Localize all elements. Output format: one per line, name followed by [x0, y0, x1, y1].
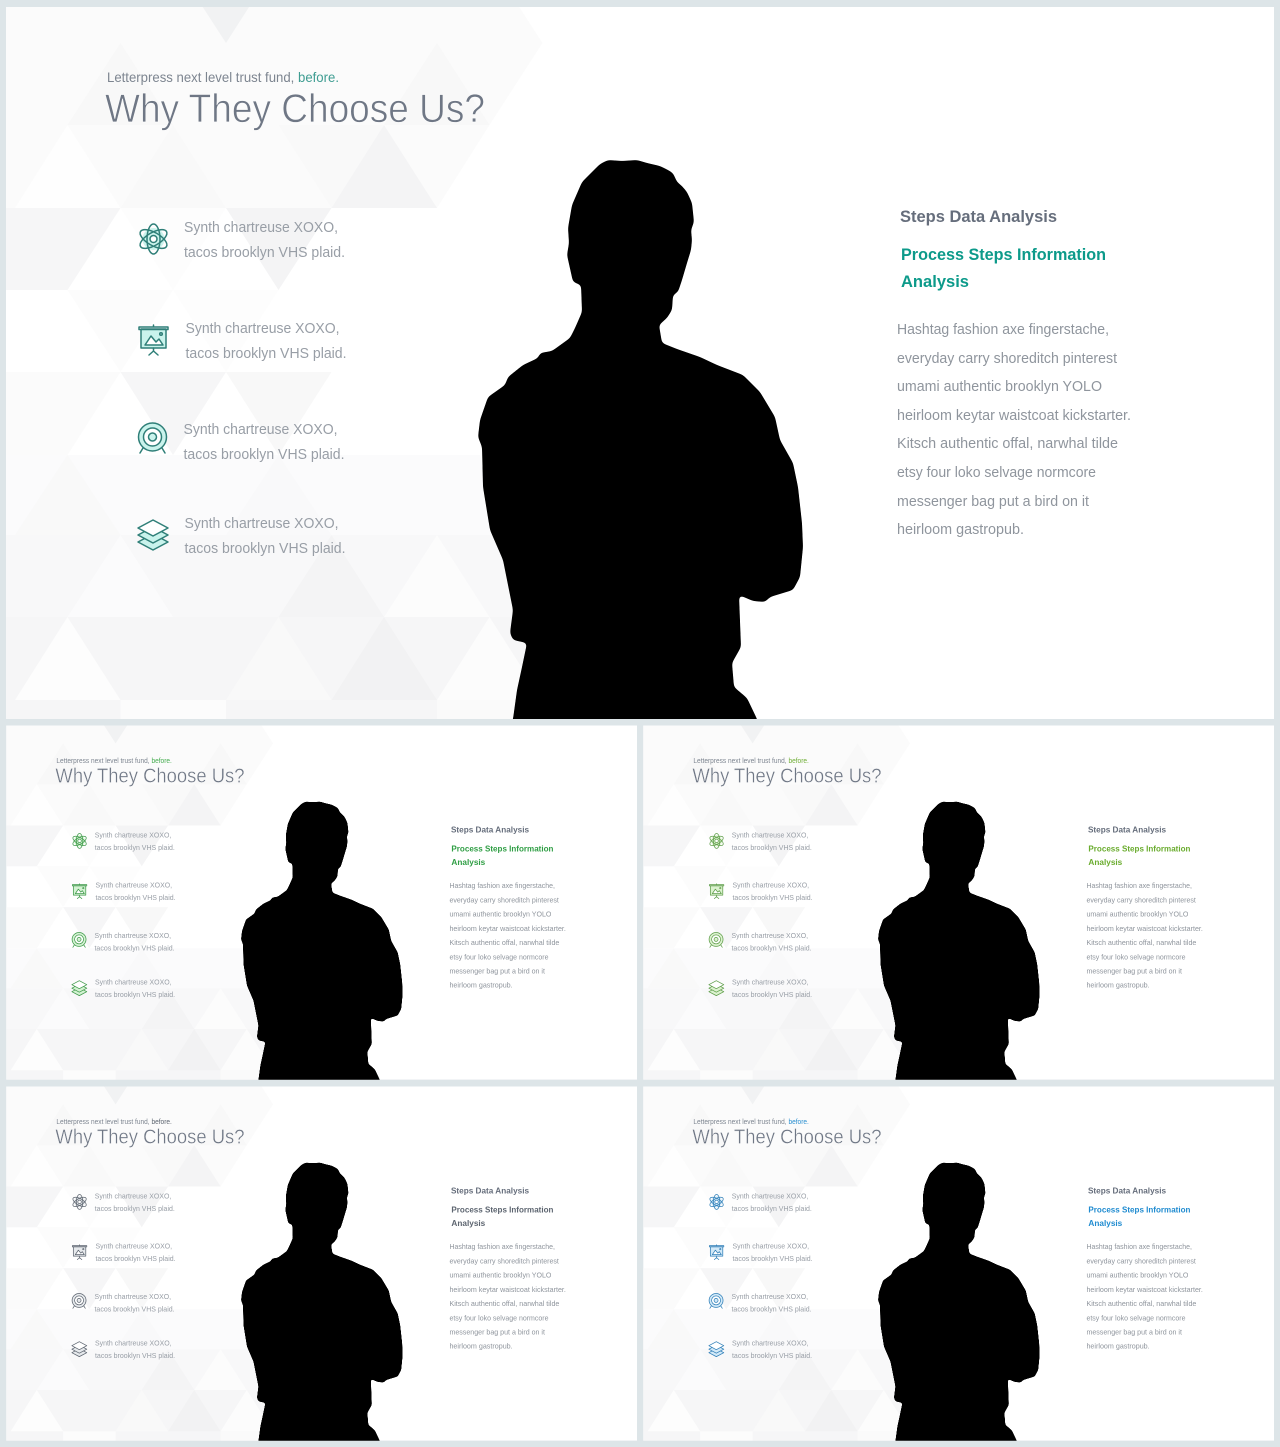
heading: steps data analysis: Steps Data Analysis [1088, 1185, 1166, 1195]
icon: atom [137, 224, 170, 254]
feature text 1: Synth chartreuse XOXO, [95, 830, 171, 839]
accent heading [451, 1204, 553, 1228]
icon: layers [72, 1342, 87, 1357]
feature text 2: Synth chartreuse XOXO, [732, 881, 809, 890]
feature text 4 [95, 1339, 175, 1360]
feature text 4: tacos brooklyn VHS plaid. [732, 990, 812, 999]
feature text 2: tacos brooklyn VHS plaid. [95, 893, 176, 902]
body paragraph: Hashtag fashion axe fingerstache, [1086, 881, 1192, 890]
body paragraph: Hashtag fashion axe fingerstache, [897, 321, 1109, 338]
icon: atom [71, 1194, 88, 1209]
feature text 3: Synth chartreuse XOXO, [94, 1292, 171, 1301]
body paragraph [1086, 1242, 1203, 1351]
body paragraph: heirloom keytar waistcoat kickstarter. [449, 1285, 566, 1294]
person silhouette [241, 1163, 403, 1447]
feature text 2 [732, 1242, 813, 1263]
feature text 2 [732, 881, 813, 902]
feature text 2: tacos brooklyn VHS plaid. [95, 1254, 176, 1263]
person silhouette [878, 1163, 1040, 1447]
feature text 1: tacos brooklyn VHS plaid. [732, 843, 812, 852]
person silhouette [878, 802, 1040, 1088]
icon: target [709, 1293, 723, 1308]
feature text 3 [731, 931, 812, 952]
icon: presentation board [72, 1245, 87, 1260]
body paragraph: heirloom gastropub. [1086, 981, 1150, 990]
body paragraph: messenger bag put a bird on it [1086, 967, 1183, 976]
body paragraph: heirloom gastropub. [449, 1342, 513, 1351]
body paragraph: Kitsch authentic offal, narwhal tilde [1086, 938, 1196, 947]
feature text 1: Synth chartreuse XOXO, [732, 830, 808, 839]
heading: steps data analysis: Steps Data Analysis [451, 824, 529, 834]
feature text 3: tacos brooklyn VHS plaid. [731, 1304, 812, 1313]
body paragraph: umami authentic brooklyn YOLO [449, 1271, 552, 1280]
slide: grey variant [6, 1064, 637, 1447]
feature text 2: Synth chartreuse XOXO, [732, 1242, 809, 1251]
feature text 2: tacos brooklyn VHS plaid. [732, 1254, 813, 1263]
body paragraph: messenger bag put a bird on it [1086, 1328, 1183, 1337]
body paragraph: Kitsch authentic offal, narwhal tilde [449, 938, 559, 947]
body paragraph: messenger bag put a bird on it [897, 493, 1090, 510]
feature text 4 [95, 978, 175, 999]
accent heading: Analysis [1088, 1218, 1123, 1228]
body paragraph: heirloom keytar waistcoat kickstarter. [1086, 924, 1203, 933]
feature text 2: Synth chartreuse XOXO, [95, 881, 172, 890]
person silhouette [478, 160, 803, 735]
feature text 1: Synth chartreuse XOXO, [732, 1191, 808, 1200]
body paragraph: everyday carry shoreditch pinterest [897, 350, 1118, 367]
icon: layers [709, 1342, 724, 1357]
feature text 1: tacos brooklyn VHS plaid. [95, 843, 175, 852]
slide: blue variant [643, 1064, 1274, 1447]
body paragraph: umami authentic brooklyn YOLO [1086, 910, 1189, 919]
feature text 3: Synth chartreuse XOXO, [184, 421, 338, 438]
accent heading: Process Steps Information [901, 245, 1106, 264]
accent heading: Analysis [1088, 857, 1123, 867]
feature text 1 [95, 830, 175, 852]
feature text 1: tacos brooklyn VHS plaid. [95, 1204, 175, 1213]
feature text 4: Synth chartreuse XOXO, [732, 1339, 809, 1348]
icon: atom [71, 833, 88, 848]
accent heading [1088, 843, 1190, 867]
title: Why They Choose Us? [105, 87, 485, 131]
feature text 2 [95, 881, 176, 902]
body paragraph: umami authentic brooklyn YOLO [449, 910, 552, 919]
icon: atom [708, 833, 725, 848]
feature text 4: Synth chartreuse XOXO, [184, 515, 338, 532]
feature text 3 [731, 1292, 812, 1313]
feature text 4 [184, 515, 346, 557]
feature text 1 [184, 219, 345, 261]
title: Why They Choose Us? [55, 766, 244, 788]
body paragraph: everyday carry shoreditch pinterest [1086, 1257, 1197, 1266]
icon: layers [138, 520, 168, 550]
body paragraph: heirloom keytar waistcoat kickstarter. [1086, 1285, 1203, 1294]
body paragraph [897, 321, 1131, 538]
body paragraph: Kitsch authentic offal, narwhal tilde [449, 1299, 559, 1308]
accent heading: Analysis [901, 272, 969, 291]
body paragraph [1086, 881, 1203, 990]
feature text 3 [94, 931, 175, 952]
slide: main teal [6, 0, 1274, 735]
feature text 4: Synth chartreuse XOXO, [732, 978, 809, 987]
icon: target [72, 932, 86, 947]
feature text 1: tacos brooklyn VHS plaid. [184, 244, 345, 261]
accent heading: Process Steps Information [451, 843, 553, 853]
feature text 2: tacos brooklyn VHS plaid. [732, 893, 813, 902]
feature text 3: Synth chartreuse XOXO, [731, 931, 808, 940]
subtitle: Letterpress next level trust fund, before. [56, 758, 172, 765]
feature text 2: Synth chartreuse XOXO, [186, 320, 340, 337]
body paragraph [449, 881, 566, 990]
body paragraph: heirloom gastropub. [1086, 1342, 1150, 1351]
subtitle: Letterpress next level trust fund, before. [693, 1119, 809, 1126]
feature text 4: Synth chartreuse XOXO, [95, 1339, 172, 1348]
body paragraph: Kitsch authentic offal, narwhal tilde [897, 435, 1118, 452]
slide: green variant [6, 703, 637, 1088]
title: Why They Choose Us? [692, 1127, 881, 1149]
icon: layers [72, 981, 87, 996]
body paragraph: Hashtag fashion axe fingerstache, [449, 881, 555, 890]
feature text 3: tacos brooklyn VHS plaid. [94, 1304, 175, 1313]
feature text 4: tacos brooklyn VHS plaid. [732, 1351, 812, 1360]
body paragraph: messenger bag put a bird on it [449, 1328, 546, 1337]
icon: layers [709, 981, 724, 996]
accent heading: Process Steps Information [451, 1204, 553, 1214]
accent heading [1088, 1204, 1190, 1228]
body paragraph: everyday carry shoreditch pinterest [449, 1257, 560, 1266]
body paragraph: Hashtag fashion axe fingerstache, [449, 1242, 555, 1251]
person silhouette [241, 802, 403, 1088]
icon: target [72, 1293, 86, 1308]
feature text 3: tacos brooklyn VHS plaid. [94, 943, 175, 952]
feature text 1: Synth chartreuse XOXO, [95, 1191, 171, 1200]
feature text 2: tacos brooklyn VHS plaid. [186, 345, 346, 362]
accent heading: Process Steps Information [1088, 843, 1190, 853]
subtitle: Letterpress next level trust fund, before. [56, 1119, 172, 1126]
body paragraph [449, 1242, 566, 1351]
feature text 2 [95, 1242, 176, 1263]
body paragraph: heirloom keytar waistcoat kickstarter. [449, 924, 566, 933]
subtitle: Letterpress next level trust fund, before. [693, 758, 809, 765]
feature text 1 [732, 830, 812, 852]
heading: steps data analysis: Steps Data Analysis [900, 207, 1057, 226]
body paragraph: umami authentic brooklyn YOLO [897, 378, 1102, 395]
icon: presentation board [709, 1245, 724, 1260]
heading: steps data analysis: Steps Data Analysis [451, 1185, 529, 1195]
body paragraph: Kitsch authentic offal, narwhal tilde [1086, 1299, 1196, 1308]
feature text 4: tacos brooklyn VHS plaid. [95, 1351, 175, 1360]
body paragraph: heirloom keytar waistcoat kickstarter. [897, 407, 1131, 424]
body paragraph: heirloom gastropub. [897, 521, 1024, 538]
body paragraph: etsy four loko selvage normcore [897, 464, 1096, 481]
icon: presentation board [709, 884, 724, 899]
icon: target [138, 423, 166, 453]
body paragraph: etsy four loko selvage normcore [449, 952, 548, 961]
accent heading [901, 245, 1106, 291]
body paragraph: umami authentic brooklyn YOLO [1086, 1271, 1189, 1280]
feature text 4 [732, 1339, 812, 1360]
body paragraph: Hashtag fashion axe fingerstache, [1086, 1242, 1192, 1251]
feature text 1 [732, 1191, 812, 1213]
icon: atom [708, 1194, 725, 1209]
feature text 3: Synth chartreuse XOXO, [731, 1292, 808, 1301]
feature text 2 [186, 320, 346, 362]
feature text 3 [184, 421, 344, 463]
subtitle: Letterpress next level trust fund, before. [107, 69, 339, 85]
body paragraph: etsy four loko selvage normcore [1086, 952, 1185, 961]
accent heading [452, 846, 553, 866]
accent heading: Analysis [451, 1218, 486, 1228]
feature text 4 [732, 978, 812, 999]
feature text 4: tacos brooklyn VHS plaid. [95, 990, 175, 999]
feature text 3: tacos brooklyn VHS plaid. [731, 943, 812, 952]
body paragraph: everyday carry shoreditch pinterest [1086, 896, 1197, 905]
body paragraph: messenger bag put a bird on it [449, 967, 546, 976]
body paragraph: etsy four loko selvage normcore [449, 1313, 548, 1322]
body paragraph: heirloom gastropub. [449, 981, 513, 990]
title: Why They Choose Us? [692, 766, 881, 788]
feature text 1: tacos brooklyn VHS plaid. [732, 1204, 812, 1213]
feature text 1 [95, 1191, 175, 1213]
body paragraph: everyday carry shoreditch pinterest [449, 896, 560, 905]
feature text 3 [94, 1292, 175, 1313]
body paragraph: etsy four loko selvage normcore [1086, 1313, 1185, 1322]
feature text 4: tacos brooklyn VHS plaid. [184, 540, 346, 557]
accent heading: Process Steps Information [1088, 1204, 1190, 1214]
feature text 2: Synth chartreuse XOXO, [95, 1242, 172, 1251]
slide: lime variant [643, 703, 1274, 1088]
feature text 3: tacos brooklyn VHS plaid. [184, 446, 344, 463]
icon: presentation board [139, 325, 168, 355]
feature text 1: Synth chartreuse XOXO, [184, 219, 338, 236]
icon: presentation board [72, 884, 87, 899]
accent heading: Analysis [451, 857, 486, 867]
title: Why They Choose Us? [55, 1127, 244, 1149]
feature text 3: Synth chartreuse XOXO, [94, 931, 171, 940]
icon: target [709, 932, 723, 947]
feature text 4: Synth chartreuse XOXO, [95, 978, 172, 987]
heading: steps data analysis: Steps Data Analysis [1088, 824, 1166, 834]
